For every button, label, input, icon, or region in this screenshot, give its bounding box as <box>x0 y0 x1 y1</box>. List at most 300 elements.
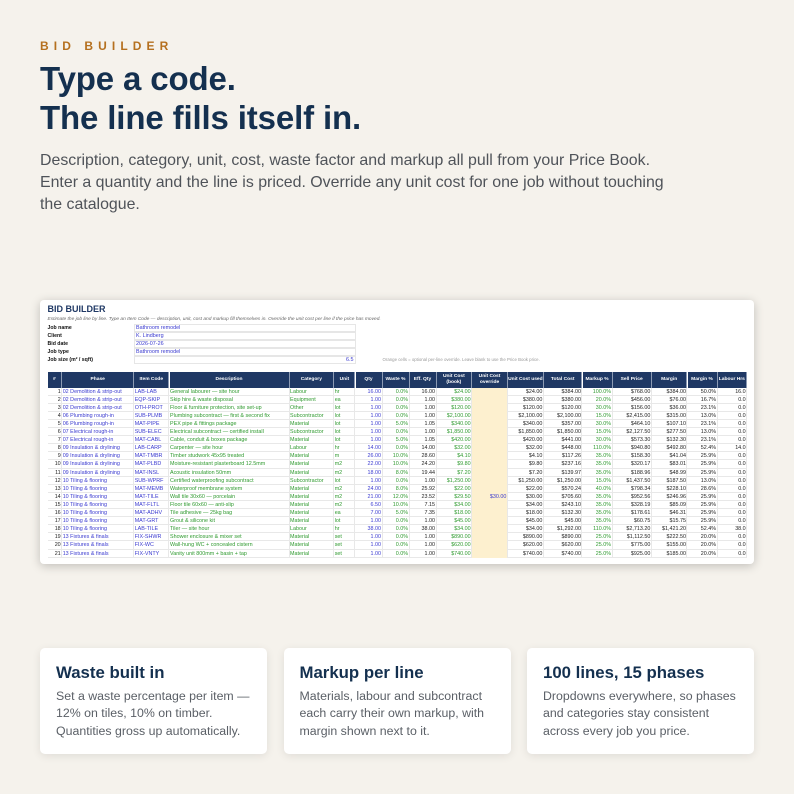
table body rows: MAT-GRT <box>135 518 158 524</box>
card: waste built in: 12% on tiles, 10% on timber. <box>56 706 212 720</box>
table body rows: 09 Insulation & drylining <box>63 470 120 476</box>
table body rows: $492.80 <box>666 445 686 451</box>
table body rows: SUB-ELEC <box>135 429 162 435</box>
table body rows: $132.30 <box>666 437 686 443</box>
table body rows: Floor & furniture protection, site set-up <box>170 405 262 411</box>
table body rows: 1.00 <box>370 542 381 548</box>
table body rows: 1.00 <box>424 534 435 540</box>
table body rows: lot <box>335 421 340 427</box>
table body rows: 0.0% <box>396 405 408 411</box>
table body rows: $768.00 <box>631 389 650 395</box>
table body rows: $2,713.20 <box>626 526 650 532</box>
table body rows: 20.0% <box>701 534 716 540</box>
table body rows: 0.0 <box>738 502 746 508</box>
table header row: Margin % <box>691 377 713 382</box>
table body rows: 14.00 <box>368 445 381 451</box>
table body rows: 14 <box>55 494 61 500</box>
table body rows: $32.00 <box>526 445 542 451</box>
table body rows: $24.00 <box>526 389 542 395</box>
table body rows: 25.0% <box>596 534 611 540</box>
table body rows: 1.00 <box>370 405 381 411</box>
table body rows: $7.20 <box>457 470 471 476</box>
table header row: Qty <box>364 377 373 382</box>
table body rows: 15.0% <box>596 478 611 484</box>
table body rows: 19.44 <box>422 470 435 476</box>
table body rows: $120.00 <box>561 405 581 411</box>
table body rows: 14.0 <box>735 445 746 451</box>
table header row: Eff. Qty <box>414 377 431 382</box>
table body rows: 0.0% <box>396 429 408 435</box>
table body rows: $46.31 <box>669 510 686 516</box>
table body rows: $705.60 <box>561 494 581 500</box>
table body rows: $36.00 <box>669 405 686 411</box>
job details block: Bid date <box>48 341 68 347</box>
table body rows: $384.00 <box>561 389 581 395</box>
card: waste built in: Quantities gross up automatically. <box>56 724 240 738</box>
table body rows: hr <box>335 526 339 532</box>
table body rows: $34.00 <box>526 526 542 532</box>
table body rows: 7 <box>58 437 61 443</box>
table body rows: 1.00 <box>424 551 435 557</box>
table body rows: 1.00 <box>370 534 381 540</box>
card: 100 lines, 15 phases: 100 lines, 15 phases <box>543 663 704 682</box>
table body rows: 0.0 <box>738 486 746 492</box>
table body rows: 10 Tiling & flooring <box>63 526 107 532</box>
table body rows: $940.80 <box>631 445 650 451</box>
table body rows: 0.0% <box>396 542 408 548</box>
table body rows: $1,250.00 <box>557 478 581 484</box>
table body rows: m2 <box>335 470 342 476</box>
table body rows: 10.0% <box>393 453 408 459</box>
table body rows: $380.00 <box>561 397 581 403</box>
table body rows: 5 <box>58 421 61 427</box>
table body rows: Electrical subcontract — certified install <box>170 429 264 435</box>
lead paragraph <box>40 152 664 212</box>
table body rows: 10 Tiling & flooring <box>63 510 107 516</box>
table body rows: 16.7% <box>701 397 716 403</box>
table body rows: 1.00 <box>424 405 435 411</box>
table header row: Unit <box>340 377 349 382</box>
table body rows: 20.0% <box>701 551 716 557</box>
table body rows: 25.0% <box>596 551 611 557</box>
table body rows: 25.9% <box>701 510 716 516</box>
card: 100 lines, 15 phases: Dropdowns everywhere, so phases <box>543 688 736 702</box>
table body rows: $1,850.00 <box>447 429 471 435</box>
card: markup per line <box>284 648 510 754</box>
table body rows: 0.0% <box>396 534 408 540</box>
table body rows: 3 <box>58 405 61 411</box>
table body rows: 13 Fixtures & finals <box>63 534 109 540</box>
card: markup per line: Materials, labour and subcontract <box>300 688 482 702</box>
table body rows: 07 Electrical rough-in <box>63 437 113 443</box>
table body rows: General labourer — site hour <box>170 389 240 395</box>
table body rows: Material <box>290 461 309 467</box>
table body rows: Certified waterproofing subcontract <box>170 478 254 484</box>
table body rows: $1,437.50 <box>626 478 650 484</box>
table body rows: MAT-TILE <box>135 494 159 500</box>
table body rows: 1.00 <box>424 478 435 484</box>
table body rows: 0.0 <box>738 542 746 548</box>
table body rows: $380.00 <box>523 397 542 403</box>
table body rows: 1.00 <box>370 478 381 484</box>
table body rows: $2,100.00 <box>518 413 542 419</box>
table body rows: $2,415.00 <box>626 413 650 419</box>
table body rows: $315.00 <box>666 413 686 419</box>
table body rows: Floor tile 60x60 — anti-slip <box>170 502 234 508</box>
table body rows: 1.00 <box>370 551 381 557</box>
table body rows: $740.00 <box>523 551 542 557</box>
table body rows: set <box>335 534 342 540</box>
table body rows: Material <box>290 437 309 443</box>
job details block: Client <box>48 333 62 339</box>
card: waste built in: Waste built in <box>56 663 164 682</box>
table body rows: $34.00 <box>454 526 471 532</box>
table body rows: Vanity unit 800mm + basin + tap <box>170 551 247 557</box>
table body rows: Subcontractor <box>290 429 324 435</box>
table body rows: Material <box>290 551 309 557</box>
table body rows: lot <box>335 478 340 484</box>
table body rows: MAT-ADHV <box>135 510 162 516</box>
table body rows: $85.09 <box>669 502 686 508</box>
card: markup per line: margin shown next to it. <box>300 724 430 738</box>
table body rows: $120.00 <box>523 405 542 411</box>
table body rows: LAB-LAB <box>135 389 157 395</box>
lead paragraph: the catalogue. <box>40 196 140 212</box>
table body rows: EQP-SKIP <box>135 397 160 403</box>
table body rows: 0.0 <box>738 405 746 411</box>
table body rows: 5.0% <box>396 437 408 443</box>
table body rows: 5.0% <box>396 510 408 516</box>
table body rows: $2,100.00 <box>557 413 581 419</box>
table body rows: $2,127.50 <box>626 429 650 435</box>
table body rows: 13 Fixtures & finals <box>63 542 109 548</box>
table body rows: 38.00 <box>422 526 435 532</box>
card: markup per line: Markup per line <box>300 663 424 682</box>
table body rows: $15.75 <box>669 518 686 524</box>
job details block: Job size (m² / sqft) <box>48 357 93 363</box>
table body rows: $740.00 <box>451 551 471 557</box>
table body rows: $45.00 <box>454 518 471 524</box>
table body rows: ea <box>335 510 341 516</box>
table body rows: 10 Tiling & flooring <box>63 502 107 508</box>
table body rows: $22.00 <box>454 486 471 492</box>
table body rows: $222.50 <box>666 534 686 540</box>
table body rows: 1.00 <box>370 437 381 443</box>
table body rows: $9.80 <box>529 461 542 467</box>
table body rows: $83.01 <box>669 461 686 467</box>
table body rows: $456.00 <box>631 397 650 403</box>
table body rows: lot <box>335 518 340 524</box>
table body rows <box>48 388 747 558</box>
table body rows: 23.1% <box>701 405 716 411</box>
eyebrow label: BID BUILDER <box>40 39 173 53</box>
table body rows: 07 Electrical rough-in <box>63 429 113 435</box>
table body rows: m2 <box>335 486 342 492</box>
table body rows: 1.00 <box>370 518 381 524</box>
table header row: Sell Price <box>621 377 643 382</box>
table body rows: $340.00 <box>523 421 542 427</box>
table body rows: $30.00 <box>526 494 542 500</box>
table body rows: 4 <box>58 413 61 419</box>
table body rows: hr <box>335 445 339 451</box>
table body rows: 35.0% <box>596 518 611 524</box>
table body rows: Moisture-resistant plasterboard 12.5mm <box>170 461 265 467</box>
table body rows: 10.0% <box>393 502 408 508</box>
table header row: Markup % <box>585 377 609 382</box>
table body rows: 10 Tiling & flooring <box>63 518 107 524</box>
table body rows: Subcontractor <box>290 478 324 484</box>
table body rows: m2 <box>335 461 342 467</box>
table body rows: 24.00 <box>368 486 381 492</box>
table body rows: $237.16 <box>561 461 581 467</box>
table body rows: 15.0% <box>596 429 611 435</box>
table body rows: MAT-PIPE <box>135 421 159 427</box>
table body rows: 10 Tiling & flooring <box>63 478 107 484</box>
table body rows: 11 <box>55 470 61 476</box>
table body rows: 38.0 <box>735 526 746 532</box>
table body rows: $1,421.20 <box>662 526 686 532</box>
table header row: Labour Hrs <box>719 377 745 382</box>
table body rows: 0.0% <box>396 526 408 532</box>
table body rows: 35.0% <box>596 502 611 508</box>
table body rows: 35.0% <box>596 453 611 459</box>
table body rows: 18 <box>55 526 61 532</box>
table body rows: 09 Insulation & drylining <box>63 461 120 467</box>
table body rows: Acoustic insulation 50mm <box>170 470 231 476</box>
table body rows: 0.0 <box>738 437 746 443</box>
table body rows: OTH-PROT <box>135 405 163 411</box>
table body rows: MAT-TMBR <box>135 453 162 459</box>
table body rows: 21 <box>55 551 61 557</box>
table body rows: 19 <box>55 534 61 540</box>
table body rows: $187.50 <box>666 478 686 484</box>
table body rows: 25.9% <box>701 502 716 508</box>
table body rows: hr <box>335 389 339 395</box>
table body rows: MAT-INSL <box>135 470 159 476</box>
table body rows: 28.6% <box>701 486 716 492</box>
table body rows: 13 <box>55 486 61 492</box>
table body rows: 52.4% <box>701 526 716 532</box>
table body rows: 8 <box>58 445 61 451</box>
table body rows: $573.30 <box>631 437 650 443</box>
table body rows: SUB-PLMB <box>135 413 162 419</box>
table body rows: m <box>335 453 339 459</box>
table body rows: LAB-CARP <box>135 445 162 451</box>
table body rows: $34.00 <box>454 502 471 508</box>
table body rows: 110.0% <box>593 445 611 451</box>
table body rows: $24.00 <box>454 389 471 395</box>
table header row: # <box>53 377 56 382</box>
table body rows: 1.05 <box>424 437 435 443</box>
table header row: Item Code <box>140 377 163 382</box>
table body rows: $76.00 <box>669 397 686 403</box>
table body rows: Other <box>290 405 303 411</box>
table body rows: ea <box>335 397 341 403</box>
table body rows: $243.10 <box>561 502 581 508</box>
table body rows: 1.00 <box>424 397 435 403</box>
table body rows: $188.96 <box>631 470 650 476</box>
table body rows: 17 <box>55 518 61 524</box>
table header row: Category <box>301 377 322 382</box>
table body rows: 26.00 <box>368 453 381 459</box>
table body rows: 1.00 <box>424 542 435 548</box>
table header row: Description <box>216 377 242 382</box>
table body rows: $1,850.00 <box>557 429 581 435</box>
table body rows: 0.0% <box>396 389 408 395</box>
table body rows: 22.00 <box>368 461 381 467</box>
table body rows: $155.00 <box>666 542 686 548</box>
table body rows: 30.0% <box>596 437 611 443</box>
table body rows: $4.10 <box>457 453 471 459</box>
table body rows: $620.00 <box>561 542 581 548</box>
table body rows: 20 <box>55 542 61 548</box>
table header row: Total Cost <box>551 377 574 382</box>
table body rows: 25.9% <box>701 518 716 524</box>
table body rows: $277.50 <box>666 429 686 435</box>
table body rows: $925.00 <box>631 551 650 557</box>
table body rows: $228.10 <box>666 486 686 492</box>
table body rows: $178.61 <box>631 510 650 516</box>
table body rows: 5.0% <box>396 421 408 427</box>
table body rows: 10 Tiling & flooring <box>63 494 107 500</box>
job details block: K. Lindberg <box>136 333 164 339</box>
table body rows: 0.0 <box>738 534 746 540</box>
table body rows: Material <box>290 486 309 492</box>
table body rows: 06 Plumbing rough-in <box>63 421 114 427</box>
table body rows: Material <box>290 542 309 548</box>
table body rows: 35.0% <box>596 510 611 516</box>
sheet subtitle: Estimate the job line by line. Type an Item Code — description, unit, cost and markup fill themselves in. Override the unit cost per line if the price has moved. <box>48 317 381 322</box>
table body rows: 1.00 <box>370 397 381 403</box>
table body rows: 7.15 <box>424 502 435 508</box>
table body rows: 0.0 <box>738 510 746 516</box>
table body rows: SUB-WPRF <box>135 478 163 484</box>
table body rows: 06 Plumbing rough-in <box>63 413 114 419</box>
table body rows: $41.04 <box>669 453 686 459</box>
table body rows: Skip hire & waste disposal <box>170 397 233 403</box>
table body rows: $380.00 <box>451 397 471 403</box>
table body rows: $798.34 <box>631 486 650 492</box>
table body rows: 16.00 <box>368 389 381 395</box>
table body rows: Carpenter — site hour <box>170 445 223 451</box>
table body rows: $246.96 <box>666 494 686 500</box>
table body rows: 0.0 <box>738 421 746 427</box>
table body rows: $158.30 <box>631 453 650 459</box>
table body rows: Shower enclosure & mixer set <box>170 534 242 540</box>
table body rows: Timber studwork 45x95 treated <box>170 453 244 459</box>
table header row: Waste % <box>386 377 405 382</box>
table body rows: 0.0% <box>396 413 408 419</box>
table body rows: Material <box>290 502 309 508</box>
table body rows: 02 Demolition & strip-out <box>63 405 122 411</box>
table body rows: 52.4% <box>701 445 716 451</box>
table body rows: $139.97 <box>561 470 581 476</box>
table body rows: 1.00 <box>424 413 435 419</box>
card: 100 lines, 15 phases <box>527 648 754 754</box>
sheet heading: BID BUILDER <box>48 304 106 314</box>
table body rows: 10.0% <box>393 461 408 467</box>
table body rows: $60.75 <box>634 518 650 524</box>
table body rows: 0.0% <box>396 397 408 403</box>
table body rows: Material <box>290 453 309 459</box>
table body rows: 16.0 <box>735 389 746 395</box>
table body rows: $890.00 <box>561 534 581 540</box>
table body rows: 23.1% <box>701 421 716 427</box>
table body rows: $320.17 <box>631 461 650 467</box>
table body rows: 16.00 <box>422 389 435 395</box>
table body rows: 0.0 <box>738 551 746 557</box>
table body rows: 13 Fixtures & finals <box>63 551 109 557</box>
table body rows: $107.10 <box>666 421 686 427</box>
card: 100 lines, 15 phases: across every job you price. <box>543 724 690 738</box>
table body rows: 35.0% <box>596 494 611 500</box>
table body rows: m2 <box>335 502 342 508</box>
table body rows: 1.00 <box>424 429 435 435</box>
table body rows: 16 <box>55 510 61 516</box>
table body rows: 10 Tiling & flooring <box>63 486 107 492</box>
table body rows: 0.0 <box>738 470 746 476</box>
table body rows: $45.00 <box>526 518 542 524</box>
table body rows: $890.00 <box>523 534 542 540</box>
table body rows: 35.0% <box>596 470 611 476</box>
table body rows: 15 <box>55 502 61 508</box>
table body rows: $34.00 <box>526 502 542 508</box>
table body rows: $48.99 <box>669 470 686 476</box>
table body rows: $117.26 <box>562 453 581 459</box>
title: The line fills itself in. <box>40 99 361 136</box>
table body rows: 0.0 <box>738 413 746 419</box>
table body rows: 35.0% <box>596 461 611 467</box>
table body rows: 25.0% <box>596 542 611 548</box>
table body rows: 6 <box>58 429 61 435</box>
table body rows: Wall-hung WC + concealed cistern <box>170 542 253 548</box>
table body rows: $29.50 <box>454 494 471 500</box>
table body rows: m2 <box>335 494 342 500</box>
table header row: Phase <box>90 377 105 382</box>
table body rows: $1,250.00 <box>447 478 471 484</box>
table body rows: 0.0 <box>738 461 746 467</box>
table body rows: 23.52 <box>422 494 435 500</box>
table body rows: 0.0 <box>738 429 746 435</box>
table body rows: $384.00 <box>666 389 686 395</box>
table body rows: $1,112.50 <box>627 534 650 540</box>
table body rows: 9 <box>58 453 61 459</box>
table body rows: 0.0% <box>396 445 408 451</box>
table body rows: Waterproof membrane system <box>170 486 242 492</box>
table body rows: $620.00 <box>523 542 542 548</box>
table body rows: 24.20 <box>422 461 435 467</box>
job details block <box>48 324 356 364</box>
table body rows: 8.0% <box>396 486 408 492</box>
title <box>40 60 361 136</box>
table body rows: 25.9% <box>701 494 716 500</box>
table body rows: 13.0% <box>701 413 716 419</box>
table body rows: lot <box>335 437 340 443</box>
table body rows: 13.0% <box>701 478 716 484</box>
table body rows: 09 Insulation & drylining <box>63 445 120 451</box>
table body rows: $340.00 <box>451 421 471 427</box>
table header row <box>48 372 747 388</box>
table body rows: 0.0 <box>738 518 746 524</box>
table body rows: MAT-FLTL <box>135 502 159 508</box>
table body rows: $570.24 <box>561 486 581 492</box>
table body rows: 0.0 <box>738 494 746 500</box>
table body rows: $4.10 <box>529 453 542 459</box>
panel: bid builder spreadsheet <box>40 300 754 564</box>
table body rows: lot <box>335 405 340 411</box>
table header row: Margin <box>661 377 677 382</box>
table body rows: $18.00 <box>526 510 542 516</box>
